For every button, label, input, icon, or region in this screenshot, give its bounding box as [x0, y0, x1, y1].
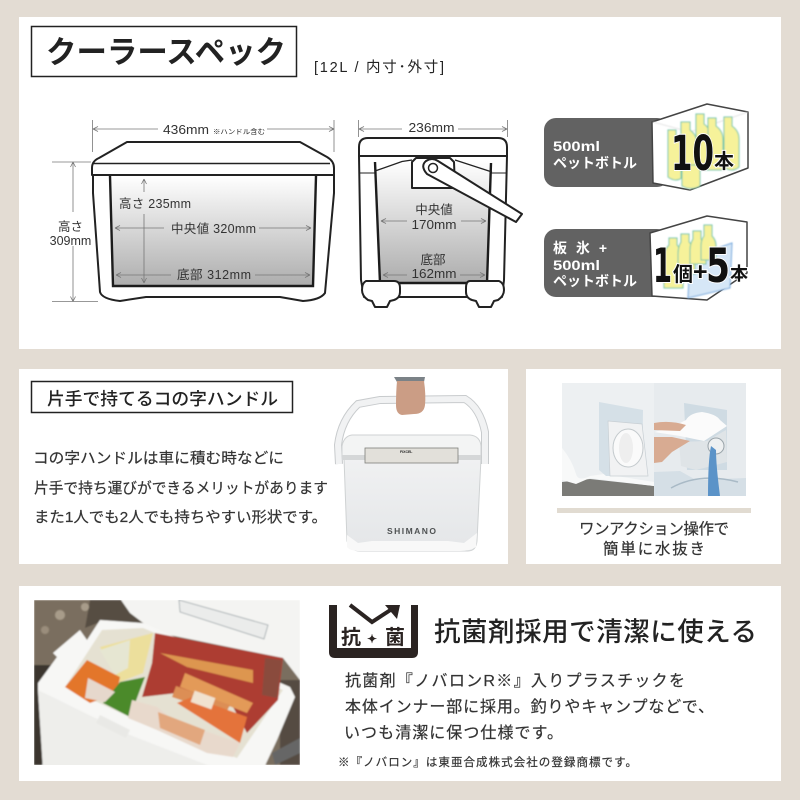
- height dimension 309mm: [50, 162, 98, 302]
- inner middle 170mm: [381, 202, 486, 232]
- badge: ice plus 5 bottles: 個: [673, 263, 693, 286]
- icon: antibacterial: [329, 605, 418, 658]
- badge: 10 bottles: [544, 104, 748, 190]
- antibacterial description: いつも清潔に保つ仕様です。: [344, 724, 563, 742]
- drain caption: [579, 520, 729, 558]
- badge: 10 bottles: 500ml: [553, 138, 600, 154]
- red bag: [142, 633, 283, 733]
- ice bag: [128, 700, 240, 757]
- antibacterial description: 本体インナー部に採用。釣りやキャンプなどで、: [345, 698, 714, 716]
- badge: ice plus 5 bottles: 5: [706, 239, 730, 294]
- side handle: [412, 158, 522, 222]
- handle description: 片手で持ち運びができるメリットがあります: [34, 480, 328, 497]
- orange package: [177, 697, 247, 743]
- feet: [362, 281, 504, 307]
- inner middle 170mm: 170mm: [412, 218, 456, 232]
- antibacterial description: 抗菌剤『ノバロンR※』入りプラスチックを: [345, 672, 685, 690]
- heading: cooler spec: クーラースペック: [46, 35, 286, 70]
- heading: antibacterial: 抗菌剤採用で清潔に使える: [434, 617, 757, 647]
- inner middle width 320mm: [115, 221, 311, 236]
- badge: 10 bottles: 10: [671, 126, 714, 182]
- drain caption: ワンアクション操作で: [579, 520, 729, 538]
- icon: antibacterial: 抗: [341, 626, 361, 649]
- inner bottom 162mm: 底部: [420, 253, 446, 267]
- SHIMANO logo: SHIMANO: [387, 526, 436, 536]
- width dimension 436mm: ※ハンドル含む: [213, 128, 265, 136]
- icon: antibacterial: 菌: [385, 626, 405, 649]
- width dimension 236mm: 236mm: [408, 121, 454, 135]
- footnote: ※『ノバロン』は東亜合成株式会社の登録商標です。: [338, 755, 637, 769]
- width dimension 436mm: 436mm: [163, 123, 209, 137]
- inner height 235mm: 高さ 235mm: [119, 196, 191, 211]
- heading: handle: 片手で持てるコの字ハンドル: [47, 389, 278, 409]
- badge: ice plus 5 bottles: ペットボトル: [553, 273, 637, 289]
- icon: antibacterial: ✦: [367, 632, 377, 646]
- inner bottom width 312mm: 底部 312mm: [177, 268, 251, 282]
- panel: cooler spec: [19, 17, 781, 349]
- inner middle width 320mm: 中央値 320mm: [171, 221, 256, 236]
- heading: cooler spec: [32, 26, 296, 76]
- photo: white cooler carried by hand: [338, 377, 485, 551]
- inner height 235mm: [119, 179, 191, 283]
- inner bottom 162mm: 162mm: [412, 267, 456, 281]
- diagram: cooler side view: [358, 120, 522, 307]
- photo: drain close-up: [562, 383, 746, 496]
- bottles and ice illustration: [664, 225, 732, 298]
- height dimension 309mm: 高さ: [58, 219, 83, 234]
- photo: white cooler carried by hand: FIXCEL: [400, 450, 413, 454]
- diagram: cooler front view: [50, 120, 334, 302]
- badge: ice plus 5 bottles: [544, 216, 748, 300]
- handle description: コの字ハンドルは車に積む時などに: [33, 450, 284, 467]
- panel: antibacterial: [19, 586, 781, 781]
- inner bottom 162mm: [383, 253, 485, 281]
- badge: ice plus 5 bottles: 500ml: [553, 257, 600, 273]
- badge: ice plus 5 bottles: 本: [730, 264, 748, 284]
- badge: ice plus 5 bottles: 1: [653, 239, 672, 294]
- bottles illustration: [653, 112, 748, 190]
- rice and vegetables: [100, 633, 153, 682]
- panel: one-hand handle: [19, 369, 508, 564]
- inner bottom width 312mm: [116, 268, 310, 282]
- badge: 10 bottles: ペットボトル: [553, 155, 637, 171]
- photo: cooler with food: [34, 600, 300, 765]
- panel: water drain: [526, 369, 781, 564]
- lid: [121, 600, 300, 680]
- badge: ice plus 5 bottles: 板 氷 +: [553, 240, 607, 256]
- height dimension 309mm: 309mm: [50, 234, 91, 248]
- width dimension 436mm: [92, 120, 334, 152]
- width dimension 236mm: [358, 120, 508, 137]
- badge: ice plus 5 bottles: +: [693, 258, 708, 286]
- badge: 10 bottles: 本: [714, 150, 734, 173]
- side handle and latches: [272, 738, 300, 765]
- handle description: [33, 450, 328, 526]
- heading: handle: [32, 382, 292, 412]
- handle description: また1人でも2人でも持ちやすい形状です。: [34, 509, 327, 526]
- cooler body: [38, 620, 295, 770]
- antibacterial description: [344, 672, 714, 742]
- drain caption: 簡単に水抜き: [603, 540, 705, 558]
- hand and sleeve: [394, 377, 425, 415]
- spec note: [12L / 内寸･外寸]: [314, 59, 444, 76]
- inner middle 170mm: 中央値: [415, 202, 453, 217]
